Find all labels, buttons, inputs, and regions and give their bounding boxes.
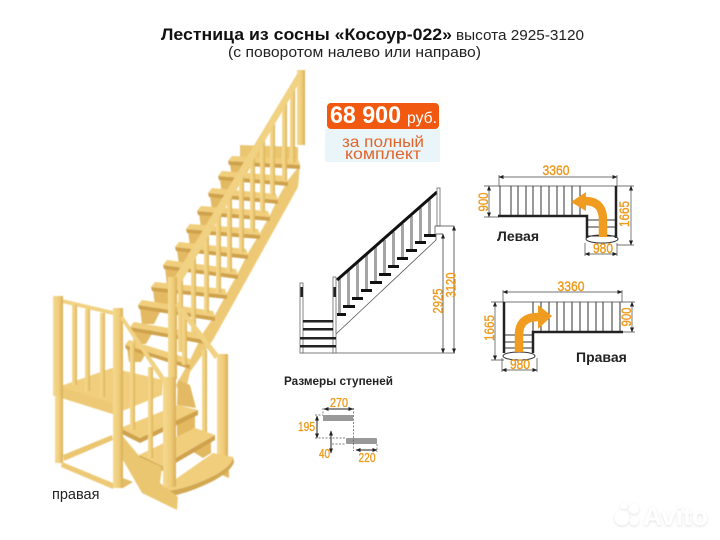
upper tread risers bbox=[127, 164, 252, 362]
price badge: руб. bbox=[407, 110, 437, 127]
left plan label: Левая bbox=[497, 228, 539, 244]
dimension arrows bbox=[317, 409, 377, 453]
right plan dimensions bbox=[482, 279, 634, 372]
upper treads bbox=[125, 156, 300, 369]
right plan label: Правая bbox=[576, 349, 627, 365]
left plan balusters bbox=[500, 186, 616, 236]
elevation dimensions: 2925 bbox=[430, 288, 446, 314]
title: высота 2925-3120 bbox=[456, 27, 584, 44]
elevation lower steps bbox=[300, 320, 336, 348]
Avito watermark bbox=[614, 501, 708, 531]
step dimensions: 40 bbox=[319, 447, 330, 461]
Avito watermark: Avito bbox=[643, 501, 708, 531]
right lower balusters and rail bbox=[175, 302, 228, 457]
upper stringer bbox=[176, 165, 300, 403]
left plan dimensions bbox=[476, 163, 632, 256]
arrow: left turn bbox=[585, 201, 603, 237]
price badge: за полный bbox=[342, 134, 424, 151]
step bars bbox=[323, 415, 353, 421]
lower flight treads bbox=[120, 380, 234, 497]
left plan dimensions: 980 bbox=[593, 241, 613, 256]
right plan dimensions: 900 bbox=[619, 308, 634, 326]
wooden staircase illustration bbox=[53, 70, 305, 510]
elevation posts bbox=[300, 188, 440, 353]
price badge: 68 900 bbox=[330, 102, 401, 129]
elevation dimensions: 3120 bbox=[442, 272, 458, 298]
right plan dimensions: 3360 bbox=[558, 279, 584, 294]
lower balusters and rail bbox=[120, 316, 176, 487]
step dimensions bbox=[298, 396, 376, 465]
right plan balusters bbox=[505, 302, 620, 348]
left plan bbox=[476, 163, 634, 256]
right plan handrails bbox=[504, 302, 623, 353]
lower stringer bbox=[120, 433, 178, 510]
right plan dimensions: 1665 bbox=[482, 315, 497, 341]
right plan bbox=[482, 279, 635, 372]
price badge: комплект bbox=[345, 146, 422, 163]
right plan dimension lines bbox=[491, 290, 635, 372]
left plan dimensions: 1665 bbox=[617, 201, 632, 227]
elevation balusters bbox=[338, 200, 431, 314]
landing frame bbox=[53, 296, 163, 489]
elevation handrail bbox=[337, 192, 437, 280]
price badge bbox=[325, 102, 440, 163]
upper balusters bbox=[178, 85, 295, 352]
top post bbox=[297, 70, 305, 145]
elevation treads bbox=[337, 234, 436, 316]
guide lines bbox=[315, 408, 377, 452]
step sizes heading: Размеры ступеней bbox=[284, 376, 393, 388]
right plan dimensions: 980 bbox=[510, 357, 530, 372]
upper landing block bbox=[240, 145, 298, 166]
step dimensions: 270 bbox=[330, 396, 348, 410]
label: right version: правая bbox=[52, 487, 99, 503]
arrow: right turn bbox=[519, 317, 538, 352]
left plan dimensions: 900 bbox=[476, 192, 491, 212]
centre post bbox=[168, 277, 177, 379]
elevation dimension lines bbox=[435, 226, 454, 353]
elevation dimensions bbox=[430, 272, 458, 314]
left plan dimension lines bbox=[484, 175, 634, 256]
step dimensions: 195 bbox=[298, 420, 315, 434]
step sizes diagram bbox=[298, 396, 377, 465]
side elevation drawing bbox=[300, 188, 458, 353]
left plan handrails bbox=[498, 186, 616, 238]
subtitle: (с поворотом налево или направо) bbox=[228, 44, 481, 61]
step dimensions: 220 bbox=[358, 451, 376, 465]
left plan dimensions: 3360 bbox=[542, 163, 570, 178]
title bbox=[161, 26, 584, 44]
upper handrail bbox=[171, 74, 302, 288]
title: Лестница из сосны «Косоур-022» bbox=[161, 26, 452, 44]
elevation stringer and ground bbox=[300, 226, 455, 353]
